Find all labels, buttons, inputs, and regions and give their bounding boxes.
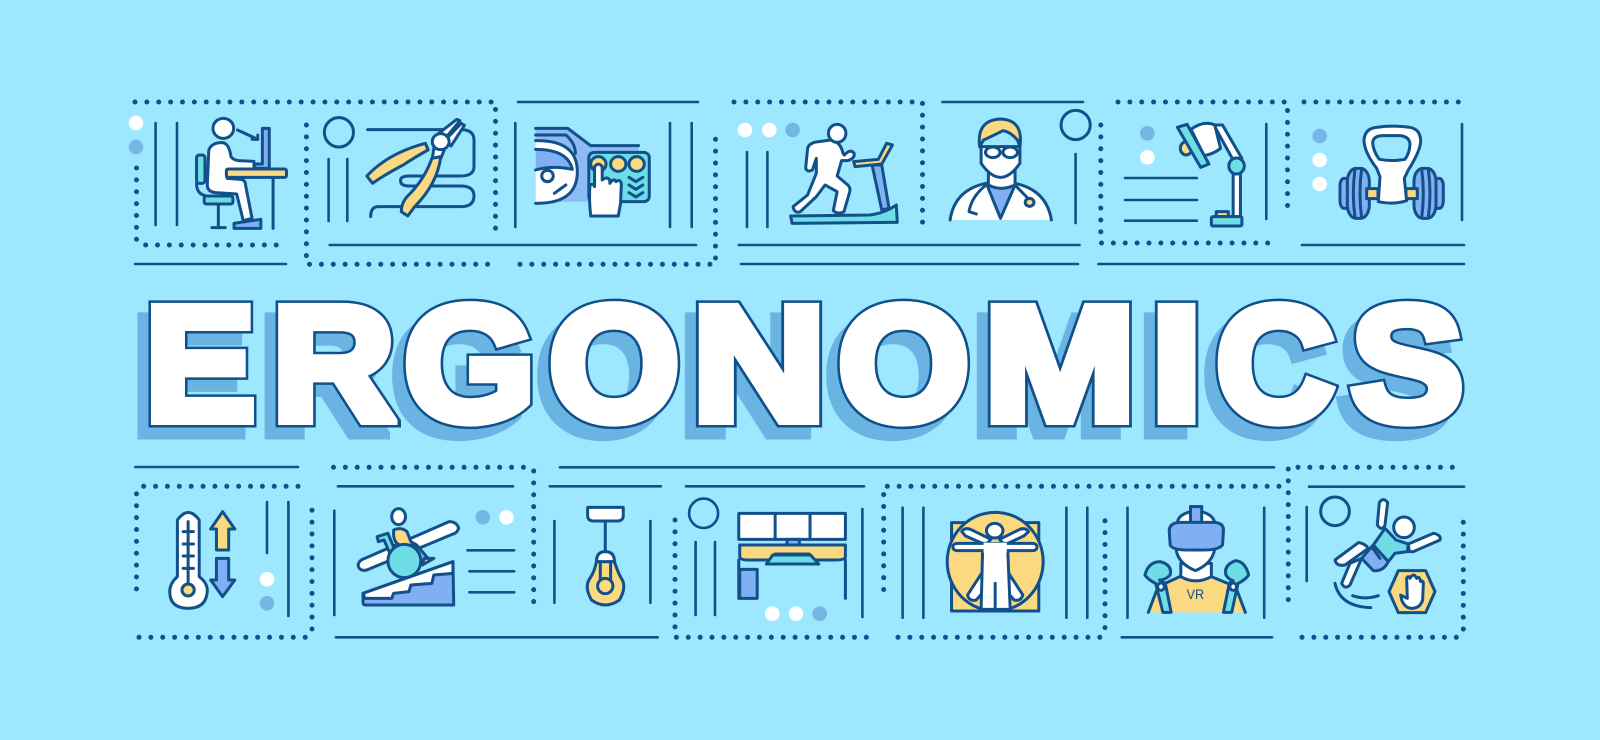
- icon: steering wheel and touch panel: [536, 128, 649, 216]
- title: I: [1150, 272, 1202, 454]
- panel: pendant light: [550, 467, 1274, 605]
- panel: pliers and wire: [135, 102, 496, 264]
- icon: hanging light bulb: [587, 507, 624, 605]
- icon: desk lamp: [1177, 123, 1244, 226]
- title: G: [393, 284, 524, 466]
- title: N: [681, 284, 815, 466]
- title: O: [826, 284, 958, 466]
- panel: doctor: [942, 102, 1090, 223]
- title: E: [145, 272, 256, 454]
- title: I: [1150, 272, 1202, 454]
- icon: person with VR headset and controllers: [1145, 507, 1249, 612]
- title: G: [404, 272, 535, 454]
- panel: temperature: [135, 467, 312, 637]
- panel: car dashboard: [330, 102, 716, 264]
- panel: stair lift: [334, 467, 658, 637]
- icon: person sitting at desk: [197, 118, 286, 228]
- title: M: [984, 272, 1136, 454]
- title: M: [984, 272, 1136, 454]
- panel: monitor workstation: [675, 486, 870, 637]
- title: C: [1205, 284, 1323, 466]
- icon: triple monitor desk: [739, 513, 845, 598]
- title: G: [404, 272, 535, 454]
- icon: person with VR headset and controllers: VR: [1187, 586, 1204, 602]
- icon: wheelchair on stair lift: [358, 509, 459, 605]
- icon: falling person and stop sign: [1321, 497, 1440, 613]
- title: E: [145, 272, 256, 454]
- title: O: [549, 272, 679, 454]
- title: O: [838, 272, 969, 454]
- title: R: [272, 272, 395, 454]
- title: O: [838, 272, 969, 454]
- panel: fall prevention: [1288, 467, 1464, 637]
- title: N: [692, 272, 826, 454]
- title: O: [549, 272, 679, 454]
- title: R: [272, 272, 395, 454]
- icon: kettlebell and dumbbell: [1340, 126, 1443, 218]
- title: M: [973, 284, 1125, 466]
- title: S: [1340, 284, 1453, 466]
- title: C: [1216, 272, 1334, 454]
- panel: adjustable lamp: [1098, 102, 1464, 264]
- title: S: [1351, 272, 1464, 454]
- panel: seated posture: [129, 116, 288, 264]
- icon: pliers with wire: [324, 118, 474, 217]
- icon: vitruvian man: [947, 512, 1043, 611]
- title: E: [134, 284, 245, 466]
- panel: kettlebell and dumbbell: [1302, 102, 1464, 245]
- panel: vitruvian man: [884, 486, 1279, 637]
- icon: thermometer with up and down arrows: [170, 512, 235, 608]
- panel: treadmill: [734, 102, 1080, 264]
- icon: doctor with stethoscope: [950, 110, 1090, 220]
- icon: person running on treadmill: [791, 124, 897, 223]
- title: R: [261, 284, 384, 466]
- title: N: [692, 272, 826, 454]
- title: S: [1351, 272, 1464, 454]
- title: I: [1140, 284, 1191, 466]
- panel: virtual reality: [1122, 507, 1272, 637]
- title: O: [538, 284, 668, 466]
- title: C: [1216, 272, 1334, 454]
